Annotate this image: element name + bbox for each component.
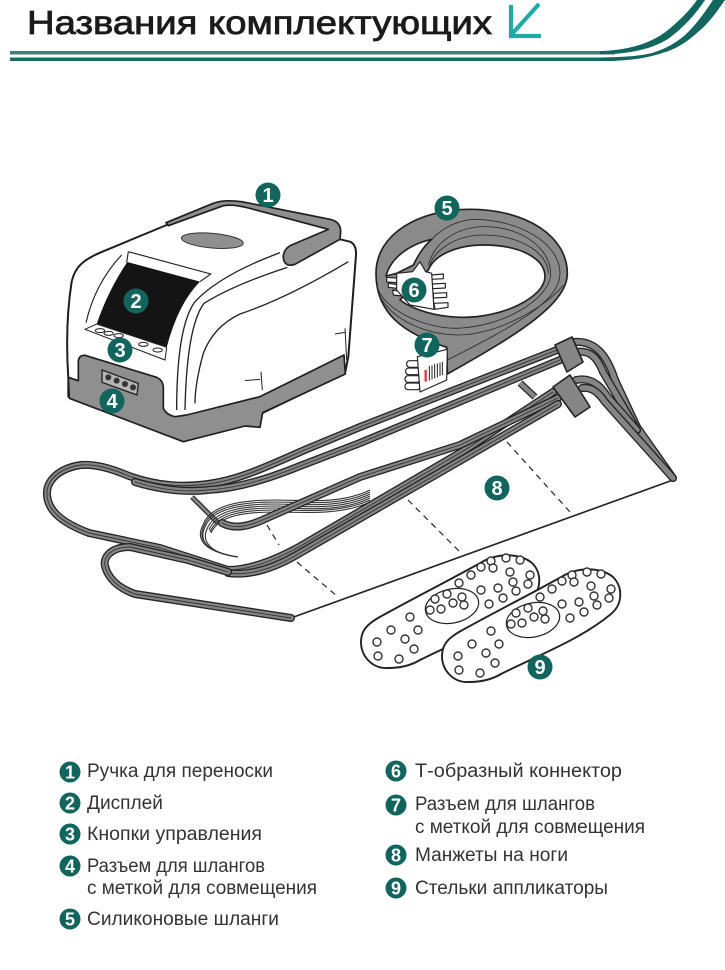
legend item 9: 9 [391,878,401,898]
cuff section dashes [267,442,570,597]
legend item 7: 7 [391,796,401,816]
legend item 3: Кнопки управления [87,824,262,845]
callout 7 [414,332,440,358]
hose B [222,398,558,574]
hose A [47,350,560,570]
insole right [442,568,620,682]
callout 1: 1 [262,185,274,207]
legend item 4: 4 [65,856,75,876]
title: Названия комплектующих [27,4,493,41]
callout 7: 7 [421,335,433,357]
display screen [97,262,200,347]
insole left [361,554,539,668]
leg cuffs [47,337,673,618]
legend: left column [60,761,317,930]
callout 3 [108,338,132,362]
legend item 6: Т-образный коннектор [415,761,622,782]
device base [68,355,345,442]
display frame lines [86,252,348,410]
top oval [181,231,244,251]
callout 9 [528,654,552,680]
callout 6 [402,278,426,302]
carrying handle [166,201,341,265]
callout 6: 6 [408,280,420,302]
legend item 7: Разъем для шлангов [415,794,595,815]
legend item 7: с меткой для совмещения [415,817,645,838]
callout 2: 2 [130,291,142,313]
callout 8 [484,476,510,500]
legend item 9: Стельки аппликаторы [415,878,608,899]
callout 4: 4 [106,391,118,413]
callout 8: 8 [491,478,503,500]
legend item 1: Ручка для переноски [87,761,273,782]
callout 1 [256,182,280,208]
hose connector with alignment mark [405,349,447,392]
callout 4 [100,388,124,414]
callout 9: 9 [534,657,546,679]
legend item 4 [60,856,317,899]
callout 5 [434,196,460,220]
legend item 7 [386,794,645,838]
hose C [105,547,291,618]
hose tails to cuff corner [573,342,673,478]
silicone hose coil [376,209,567,392]
control buttons [85,324,167,360]
lower strap [553,375,590,417]
callout 3: 3 [114,340,126,362]
applicator insoles [361,554,620,682]
legend item 5: 5 [65,910,75,930]
legend item 6: 6 [391,762,401,782]
hose rod [520,383,535,397]
legend: right column [386,760,645,899]
striped inner hose loop [200,490,370,557]
hose port [102,370,138,395]
legend item 8: Манжеты на ноги [415,845,568,866]
device body [67,202,356,433]
device: main unit [67,201,356,442]
legend item 2: 2 [65,794,75,814]
legend item 8: 8 [391,846,401,866]
callout 2 [124,288,148,314]
upper strap [555,337,583,372]
legend item 2: Дисплей [87,793,163,814]
cuff outline [291,480,673,618]
header rule with swoosh [10,0,725,61]
legend item 5: Силиконовые шланги [87,909,279,930]
icon: arrow pointing down-left [511,4,541,36]
legend item 4: с меткой для совмещения [87,878,317,899]
legend item 4: Разъем для шлангов [87,856,265,877]
T-shaped connector [387,262,448,309]
callout 5: 5 [441,198,453,220]
legend item 1: 1 [65,762,75,782]
legend item 3: 3 [65,824,75,844]
